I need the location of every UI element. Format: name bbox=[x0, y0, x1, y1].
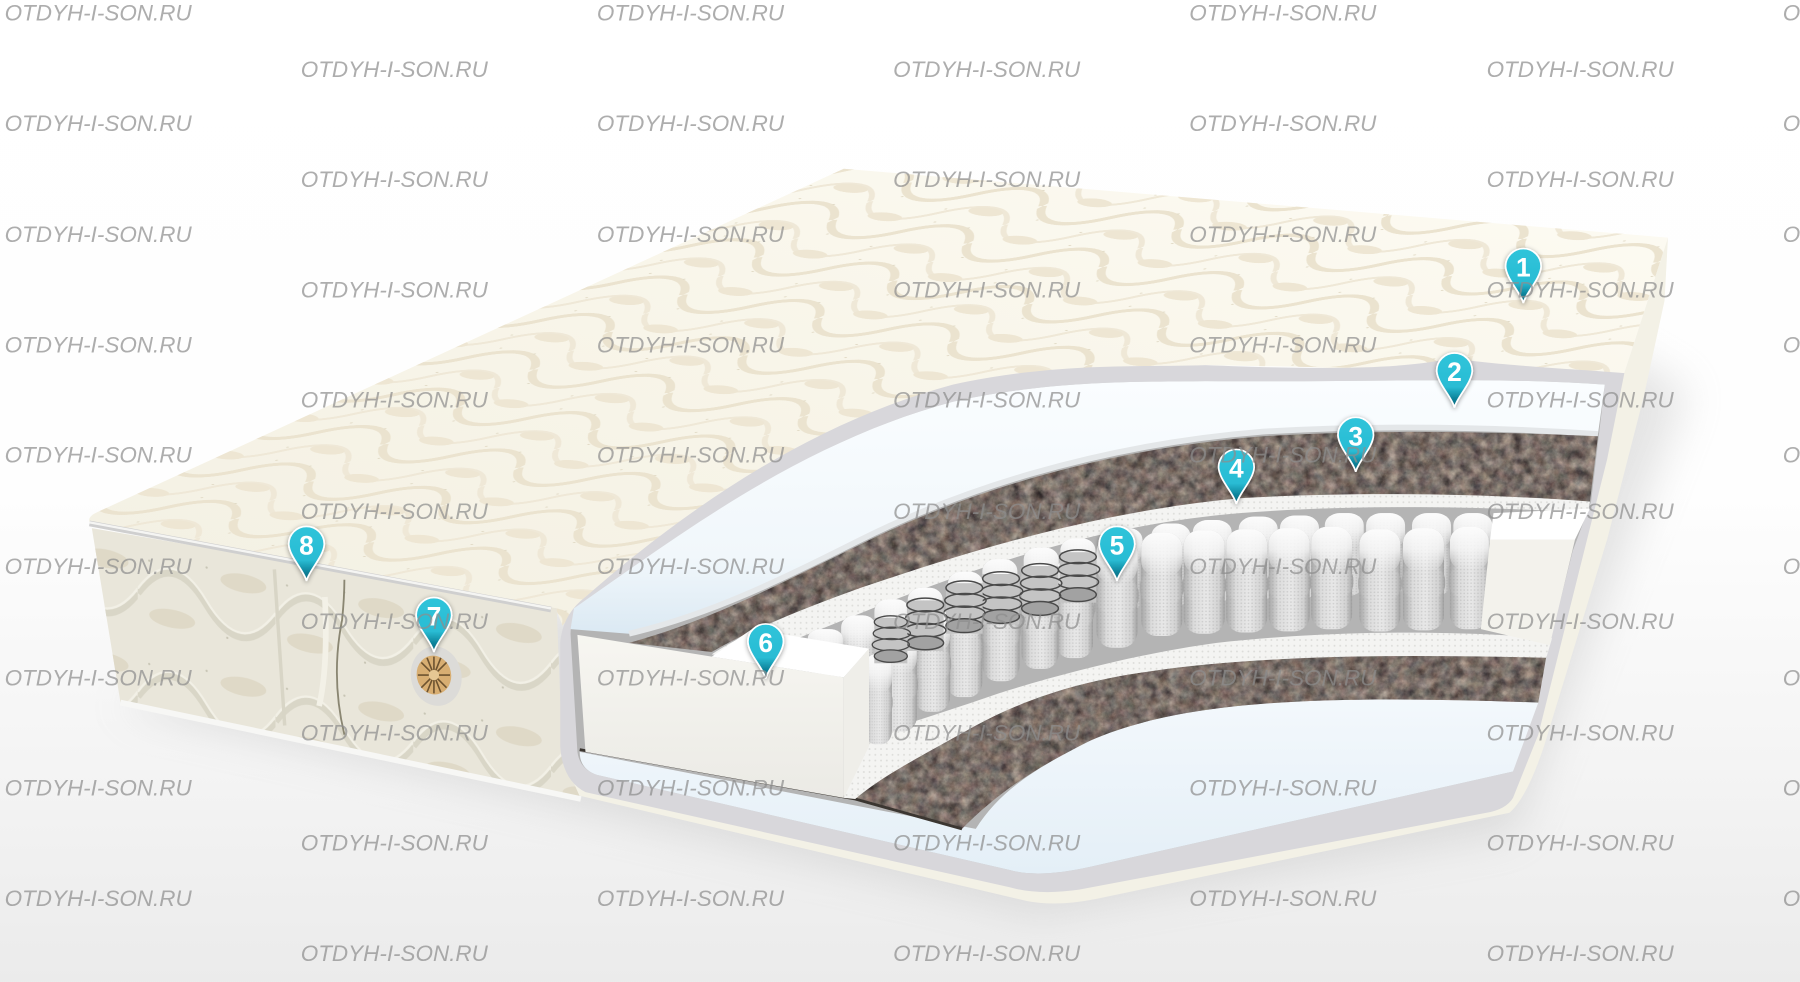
watermarks: OTDYH-I-SON.RU bbox=[301, 499, 488, 524]
watermarks: OTDYH-I-SON.RU bbox=[1189, 554, 1377, 579]
watermarks: OTDYH-I-SON.RU bbox=[1189, 443, 1377, 468]
watermarks: OTDYH-I-SON.RU bbox=[893, 831, 1080, 856]
layer: bottom foam bbox=[580, 699, 1538, 873]
marker 7: 7 bbox=[427, 602, 441, 632]
marker 2: 2 bbox=[1447, 357, 1462, 387]
marker 4: 4 bbox=[1229, 454, 1244, 484]
watermarks: OTDYH-I-SON.RU bbox=[1487, 277, 1674, 302]
watermarks: OTDYH-I-SON.RU bbox=[301, 941, 488, 966]
marker 5: 5 bbox=[1110, 530, 1124, 560]
inner cavity bbox=[571, 380, 1605, 873]
marker 6 bbox=[748, 624, 783, 678]
watermarks: OTDYH-I-SON.RU bbox=[5, 776, 192, 801]
front side quilted face bbox=[90, 522, 581, 799]
watermarks: OTDYH-I-SON.RU bbox=[301, 277, 488, 302]
watermarks: OTDYH-I-SON.RU bbox=[301, 57, 488, 82]
layer: top foam bbox=[571, 380, 1605, 634]
watermarks: OTDYH-I-SON.RU bbox=[301, 388, 488, 413]
numbered markers bbox=[289, 249, 1541, 678]
watermarks: OTDYH-I-SON.RU bbox=[597, 443, 784, 468]
layer: bottom felt bbox=[855, 656, 1546, 829]
watermarks: OTDYH-I-SON.RU bbox=[1189, 332, 1377, 357]
watermarks: OTDYH-I-SON.RU bbox=[1487, 831, 1674, 856]
watermarks: OTDYH-I-SON.RU bbox=[5, 111, 192, 136]
watermarks: OTDYH-I-SON.RU bbox=[301, 720, 488, 745]
watermarks: OTDYH-I-SON.RU bbox=[597, 332, 784, 357]
layer: bottom spunbond strip bbox=[844, 633, 1552, 799]
exposed steel coils bbox=[872, 550, 1100, 663]
marker 1: 1 bbox=[1516, 253, 1531, 283]
back row of pocket springs bbox=[807, 513, 1493, 698]
marker 4 bbox=[1219, 449, 1254, 504]
watermarks: OTDYH-I-SON.RU bbox=[1487, 941, 1674, 966]
watermarks: OTDYH-I-SON.RU bbox=[5, 1, 192, 26]
watermarks: OTDYH-I-SON.RU bbox=[1487, 167, 1674, 192]
watermarks: OTDYH-I-SON.RU bbox=[301, 167, 488, 192]
watermarks: OTDYH-I-SON.RU bbox=[597, 1, 784, 26]
floor shadow bbox=[115, 344, 1688, 913]
watermarks: OTDYH-I-SON.RU bbox=[893, 941, 1080, 966]
dark felt edge line bbox=[580, 750, 962, 829]
layer: top felt bbox=[629, 432, 1598, 652]
watermarks: OTDYH-I-SON.RU bbox=[597, 665, 784, 690]
watermarks: OTDYH-I-SON.RU bbox=[1487, 499, 1674, 524]
pocket spring block bbox=[807, 513, 1493, 744]
watermarks: OTDYH-I-SON.RU bbox=[5, 665, 192, 690]
marker 3 bbox=[1338, 417, 1374, 472]
watermarks: OTDYH-I-SON.RU bbox=[5, 886, 192, 911]
watermarks: OTDYH-I-SON.RU bbox=[893, 57, 1080, 82]
watermarks: OTDYH-I-SON.RU bbox=[597, 554, 784, 579]
foam perimeter block: left bbox=[577, 629, 869, 798]
watermarks: OTDYH-I-SON.RU bbox=[1189, 1, 1377, 26]
watermarks: OTDYH-I-SON.RU bbox=[1189, 886, 1377, 911]
watermarks: OTDYH-I-SON.RU bbox=[597, 776, 784, 801]
watermarks: OTDYH-I-SON.RU bbox=[893, 609, 1080, 634]
watermarks: OTDYH-I-SON.RU bbox=[597, 222, 784, 247]
watermarks: OTDYH-I-SON.RU bbox=[5, 332, 192, 357]
foam perimeter block: right bbox=[1481, 509, 1590, 645]
front row of pocket springs bbox=[864, 527, 1490, 744]
watermarks: OTDYH-I-SON.RU bbox=[301, 609, 488, 634]
watermarks: OTDYH-I-SON.RU bbox=[301, 831, 488, 856]
marker 3: 3 bbox=[1348, 421, 1363, 451]
watermarks: OTDYH-I-SON.RU bbox=[893, 167, 1080, 192]
watermarks: OTDYH-I-SON.RU bbox=[1487, 388, 1674, 413]
gray cover strip around cutaway bbox=[560, 358, 1624, 892]
right side edge and bottom cream border bbox=[574, 238, 1668, 904]
marker 8: 8 bbox=[299, 530, 314, 560]
air vent bbox=[405, 642, 467, 711]
side handle bbox=[274, 569, 344, 737]
mattress body bbox=[89, 169, 1668, 904]
layer: top spunbond strip bbox=[712, 494, 1590, 659]
watermarks: OTDYH-I-SON.RU bbox=[1189, 776, 1377, 801]
watermarks: OTDYH-I-SON.RU bbox=[1487, 720, 1674, 745]
marker 1 bbox=[1506, 249, 1541, 303]
watermarks: OTDYH-I-SON.RU bbox=[893, 277, 1080, 302]
marker 5 bbox=[1099, 526, 1135, 581]
watermarks: OTDYH-I-SON.RU bbox=[893, 499, 1080, 524]
watermarks: OTDYH-I-SON.RU bbox=[5, 222, 192, 247]
watermarks: OTDYH-I-SON.RU bbox=[597, 111, 784, 136]
watermarks: OTDYH-I-SON.RU bbox=[1189, 665, 1377, 690]
marker 2 bbox=[1437, 353, 1472, 408]
watermarks: OTDYH-I-SON.RU bbox=[597, 886, 784, 911]
marker 8 bbox=[289, 526, 324, 581]
watermarks: OTDYH-I-SON.RU bbox=[5, 554, 192, 579]
watermarks: OTDYH-I-SON.RU bbox=[5, 443, 192, 468]
watermarks: OTDYH-I-SON.RU bbox=[1189, 222, 1377, 247]
watermarks: OTDYH-I-SON.RU bbox=[893, 720, 1080, 745]
marker 6: 6 bbox=[758, 628, 773, 658]
marker 7 bbox=[416, 598, 452, 652]
watermarks: OTDYH-I-SON.RU bbox=[1487, 57, 1674, 82]
watermarks: OTDYH-I-SON.RU bbox=[893, 388, 1080, 413]
watermarks: OTDYH-I-SON.RU bbox=[1189, 111, 1377, 136]
top quilted surface bbox=[89, 169, 1668, 626]
watermarks: OTDYH-I-SON.RU bbox=[1487, 609, 1674, 634]
